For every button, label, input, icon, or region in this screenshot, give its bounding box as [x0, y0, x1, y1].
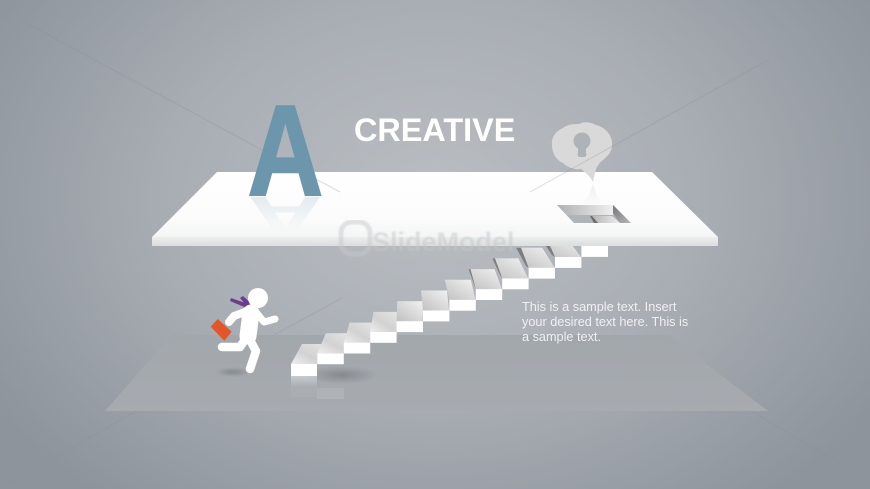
floor panel — [105, 335, 768, 411]
title: CREATIVE — [354, 112, 515, 148]
letter A: A — [248, 79, 323, 222]
letter A reflection: A — [248, 185, 323, 247]
staircase shadow — [306, 366, 378, 384]
runner shadow — [215, 367, 251, 377]
body text: This is a sample text. Insert — [522, 300, 677, 314]
watermark: SlideModel — [372, 227, 515, 257]
body — [222, 312, 275, 369]
body text: a sample text. — [522, 330, 601, 344]
platform — [152, 172, 718, 246]
briefcase — [211, 319, 232, 341]
tie — [230, 296, 254, 309]
icon: running businessman — [211, 288, 275, 369]
body text: your desired text here. This is — [522, 315, 688, 329]
staircase reflection — [291, 376, 344, 399]
staircase — [291, 237, 608, 376]
perspective lines over platform — [30, 25, 770, 192]
icon: light bulb keyhole — [574, 132, 590, 157]
hole in platform — [557, 205, 631, 223]
head — [248, 288, 268, 308]
bubble reflection — [580, 184, 606, 205]
icon: brain thought bubble with light bulb — [552, 122, 612, 182]
